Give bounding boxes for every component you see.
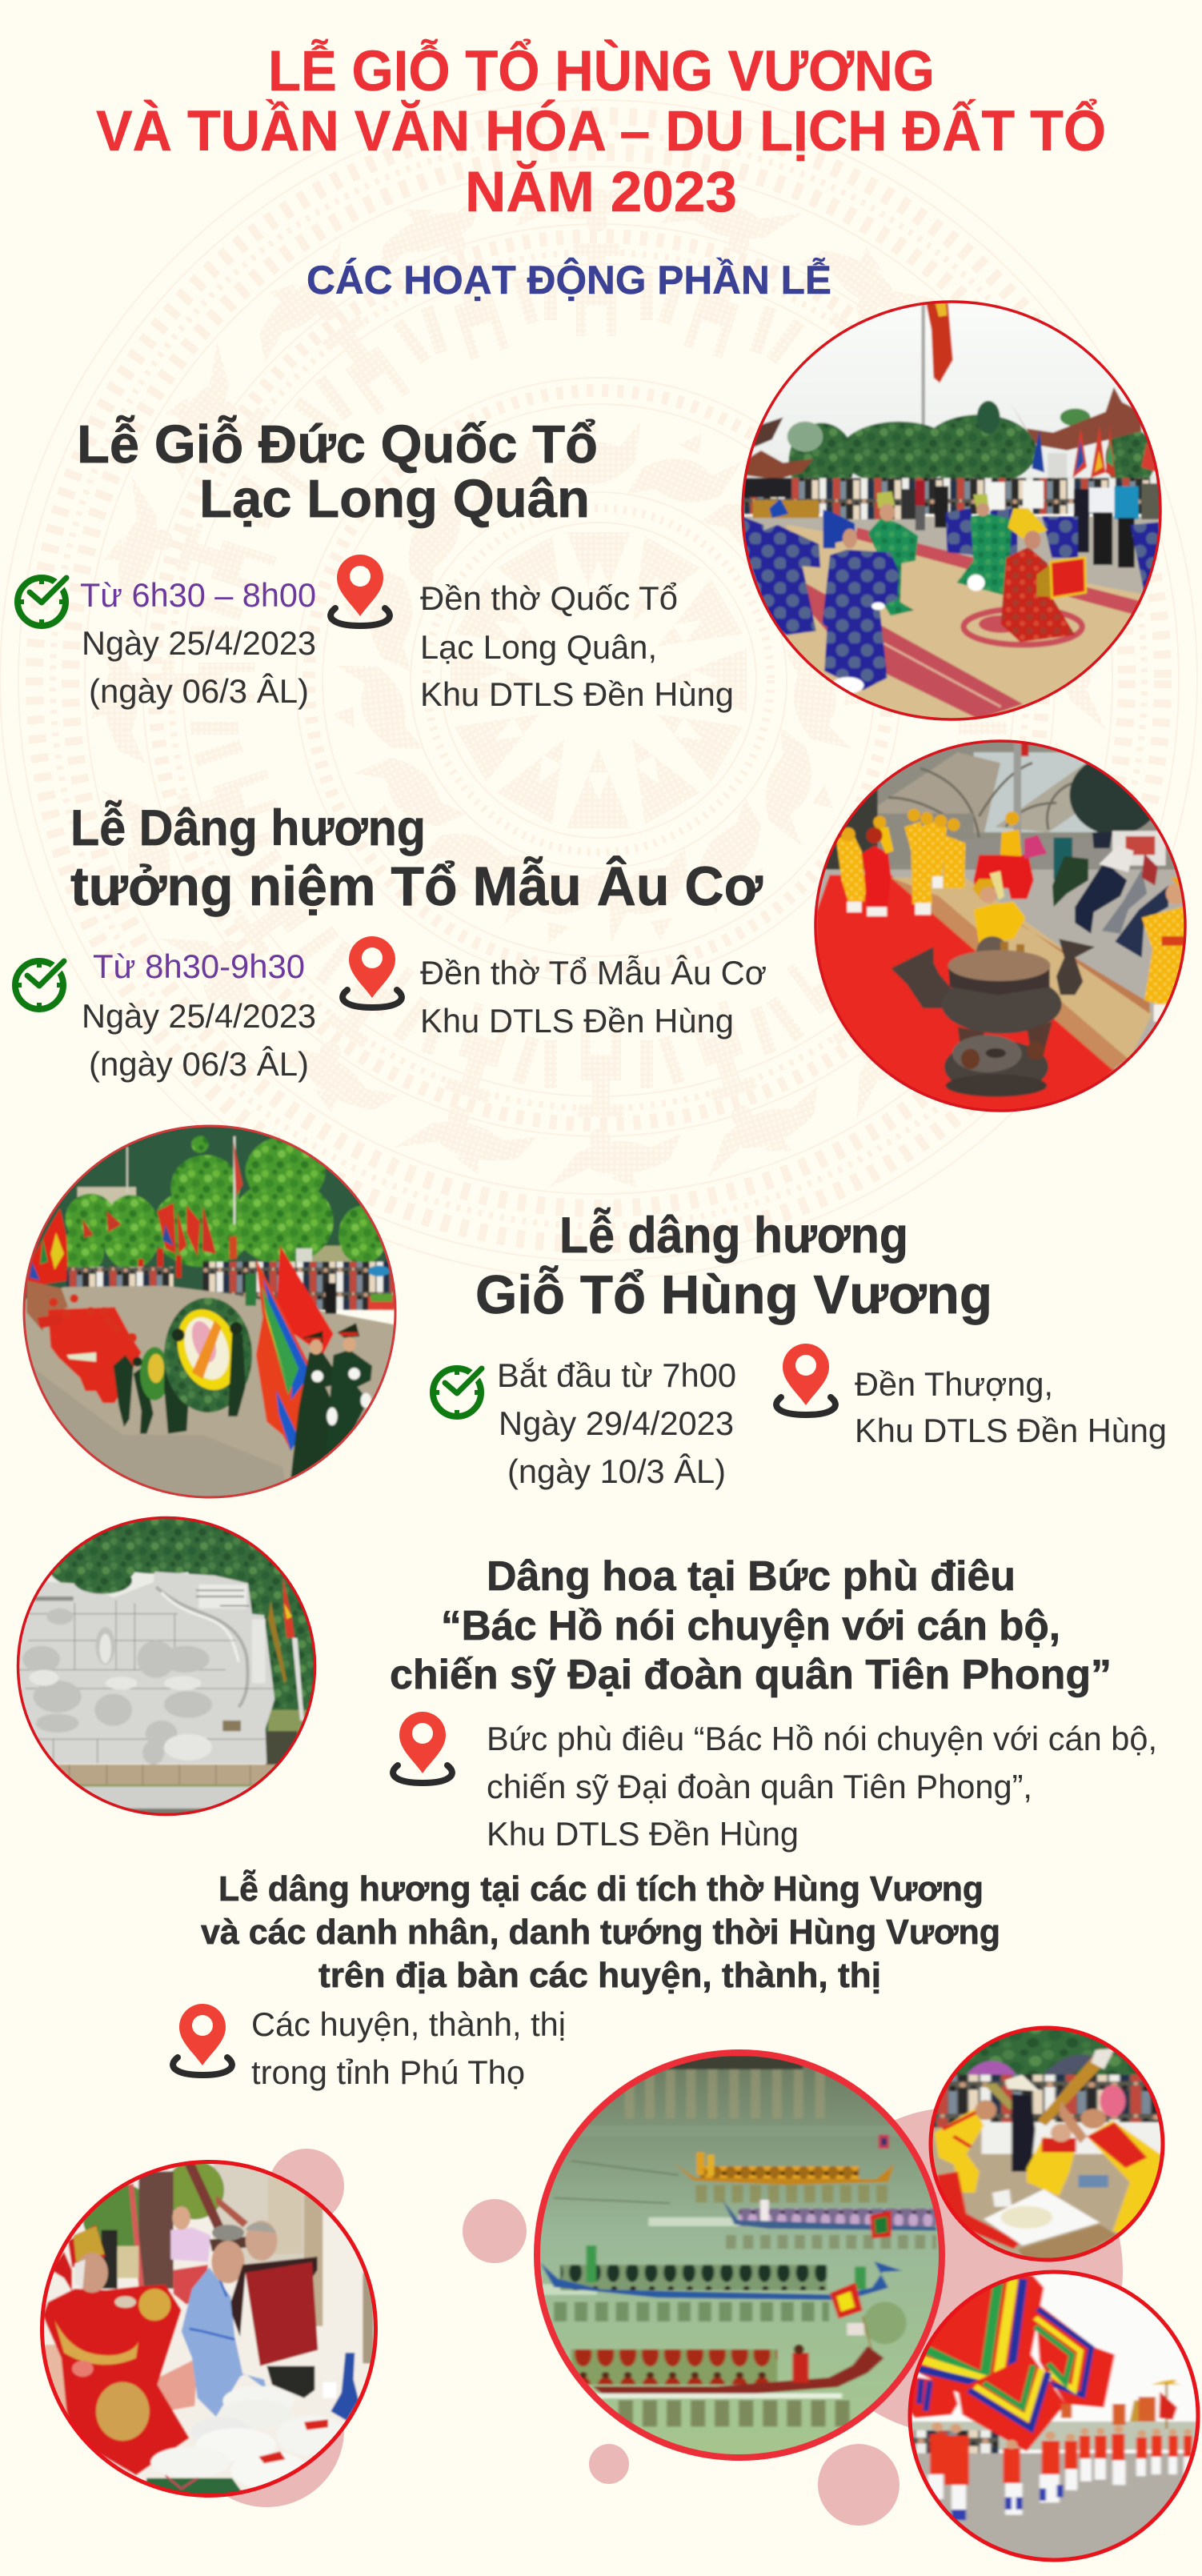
time text: (ngày 10/3 ÂL) [507, 1452, 726, 1490]
icon: location pin [331, 555, 390, 626]
icon: clock check [433, 1368, 482, 1416]
icon: location pin [173, 2004, 232, 2075]
photo: stone relief wall [12, 1512, 322, 1817]
icon: location pin [393, 1712, 452, 1783]
background pattern: bronze drum [0, 82, 1197, 1279]
location text: trong tỉnh Phú Thọ [251, 2053, 525, 2091]
location text: Các huyện, thành, thị [251, 2005, 566, 2043]
heading: và các danh nhân, danh tướng thời Hùng Vương [201, 1913, 1000, 1952]
heading: “Bác Hồ nói chuyện với cán bộ, [441, 1603, 1060, 1649]
time text: Ngày 25/4/2023 [82, 997, 316, 1035]
icon: clock check [15, 961, 64, 1009]
icon: location pin [343, 936, 402, 1008]
location text [855, 1365, 1167, 1449]
heading [201, 1869, 1000, 1995]
time text: Từ 8h30-9h30 [93, 947, 305, 985]
title: NĂM 2023 [465, 161, 737, 224]
heading: Dâng hoa tại Bức phù điêu [487, 1553, 1016, 1600]
heading [77, 415, 598, 529]
location text: Đền thờ Tổ Mẫu Âu Cơ [420, 954, 767, 992]
time text: (ngày 06/3 ÂL) [89, 1045, 309, 1083]
heading: Lạc Long Quân [199, 469, 590, 529]
heading: Lễ Dâng hương [70, 800, 426, 856]
photo: officiant and rice cakes [40, 2160, 378, 2498]
title: LỄ GIỖ TỔ HÙNG VƯƠNG [268, 39, 935, 103]
time text: Bắt đầu từ 7h00 [497, 1356, 736, 1394]
location text: Bức phù điêu “Bác Hồ nói chuyện với cán bộ, [487, 1720, 1157, 1757]
time text: Ngày 25/4/2023 [82, 624, 316, 662]
panel: Âu Cơ incense ceremony [15, 736, 1192, 1120]
location text: Đền Thượng, [855, 1365, 1053, 1403]
heading: Lễ Giỗ Đức Quốc Tổ [77, 415, 598, 475]
heading: tưởng niệm Tổ Mẫu Âu Cơ [70, 855, 763, 917]
photo: flag procession [907, 2270, 1202, 2566]
location text: Đền thờ Quốc Tổ [420, 579, 678, 617]
time text: (ngày 06/3 ÂL) [89, 672, 309, 710]
heading: chiến sỹ Đại đoàn quân Tiên Phong” [390, 1652, 1112, 1698]
decorative pink dots [189, 2107, 1123, 2526]
location text: Khu DTLS Đền Hùng [420, 1002, 734, 1040]
time text [82, 947, 316, 1083]
location text: Khu DTLS Đền Hùng [487, 1815, 799, 1853]
icon: location pin [776, 1344, 835, 1415]
panel: incense at local relics [173, 1869, 1000, 2091]
heading [390, 1553, 1112, 1698]
location text [420, 579, 734, 713]
location text: Khu DTLS Đền Hùng [855, 1412, 1167, 1449]
location text [420, 954, 767, 1040]
heading: Lễ dâng hương [559, 1208, 908, 1264]
panel: Lạc Long Quân ceremony [18, 296, 1168, 728]
heading: Lễ dâng hương tại các di tích thờ Hùng Vương [218, 1869, 984, 1909]
location text: Khu DTLS Đền Hùng [420, 675, 734, 713]
time text [497, 1356, 736, 1490]
heading: trên địa bàn các huyện, thành, thị [319, 1956, 881, 1995]
icon: clock check [18, 578, 66, 626]
time text: Từ 6h30 – 8h00 [80, 576, 316, 614]
photo: dragon boat race [534, 2049, 945, 2461]
title [96, 39, 1106, 224]
location text [251, 2005, 566, 2091]
title: VÀ TUẦN VĂN HÓA – DU LỊCH ĐẤT TỔ [96, 99, 1106, 163]
photo: soldiers carrying wreath [16, 1120, 400, 1504]
subtitle: CÁC HOẠT ĐỘNG PHẦN LỄ [307, 257, 831, 302]
heading: Giỗ Tổ Hùng Vương [475, 1264, 992, 1325]
photo: rice pounding [928, 2024, 1168, 2270]
time text: Ngày 29/4/2023 [499, 1404, 734, 1442]
panel: Hùng Vương incense ceremony [16, 1120, 1167, 1504]
time text [80, 576, 316, 710]
photo: incense burner on red carpet [808, 736, 1192, 1120]
location text: Lạc Long Quân, [420, 628, 657, 666]
location text [487, 1720, 1157, 1853]
heading [475, 1208, 992, 1325]
heading [70, 800, 763, 917]
location text: chiến sỹ Đại đoàn quân Tiên Phong”, [487, 1768, 1032, 1805]
photo: ceremony at Lạc Long Quân temple [736, 296, 1168, 728]
panel: flower offering at the relief [12, 1512, 1157, 1853]
